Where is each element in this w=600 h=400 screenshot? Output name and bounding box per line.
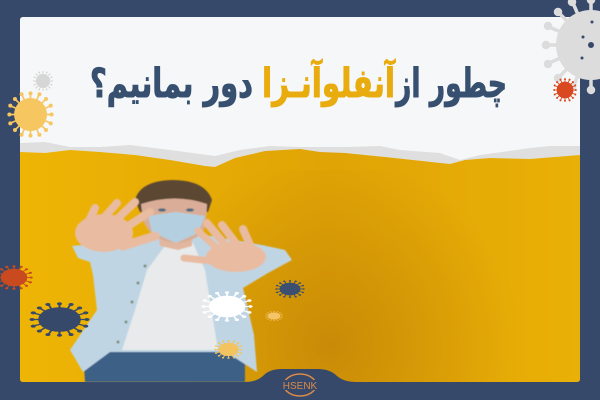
logo text: [283, 380, 317, 390]
virus: white: [202, 292, 252, 321]
virus: red left: [0, 266, 32, 289]
virus: navy dots on big virus: [580, 20, 594, 60]
background shade: [140, 170, 520, 382]
virus: navy small: [276, 280, 304, 298]
virus: grey left: [34, 72, 52, 90]
eyes: [158, 208, 194, 212]
neck: [158, 232, 192, 250]
title: [90, 58, 507, 107]
panel: yellow background: [20, 149, 580, 382]
logo tab: [245, 369, 356, 382]
panel: white header: [20, 17, 580, 170]
face: [141, 198, 207, 243]
denim jacket: [70, 235, 292, 372]
virus: small yellow: [265, 311, 283, 321]
torn paper edge: [20, 142, 580, 170]
logo: [283, 374, 318, 396]
jacket buttons: [116, 264, 146, 344]
right hand: [184, 223, 266, 272]
title word: stay away: دور بمانیم؟: [90, 61, 253, 107]
jeans: [83, 350, 245, 382]
person wearing mask: [70, 180, 292, 382]
logo: HSENK: [283, 381, 318, 392]
virus: navy large: [31, 303, 88, 336]
virus: small red top right: [554, 79, 576, 101]
logo ring: [284, 374, 316, 396]
title word: how to: چطور از: [395, 61, 507, 107]
hair: [135, 180, 212, 212]
mask: [148, 212, 205, 243]
title word: influenza: آنفلوآنـزا: [262, 58, 396, 107]
virus: yellow left: [8, 92, 53, 137]
t-shirt: [122, 243, 218, 350]
virus: yellow on jacket: [215, 340, 242, 359]
virus: big grey top right: [544, 0, 600, 92]
left hand: [75, 202, 155, 252]
